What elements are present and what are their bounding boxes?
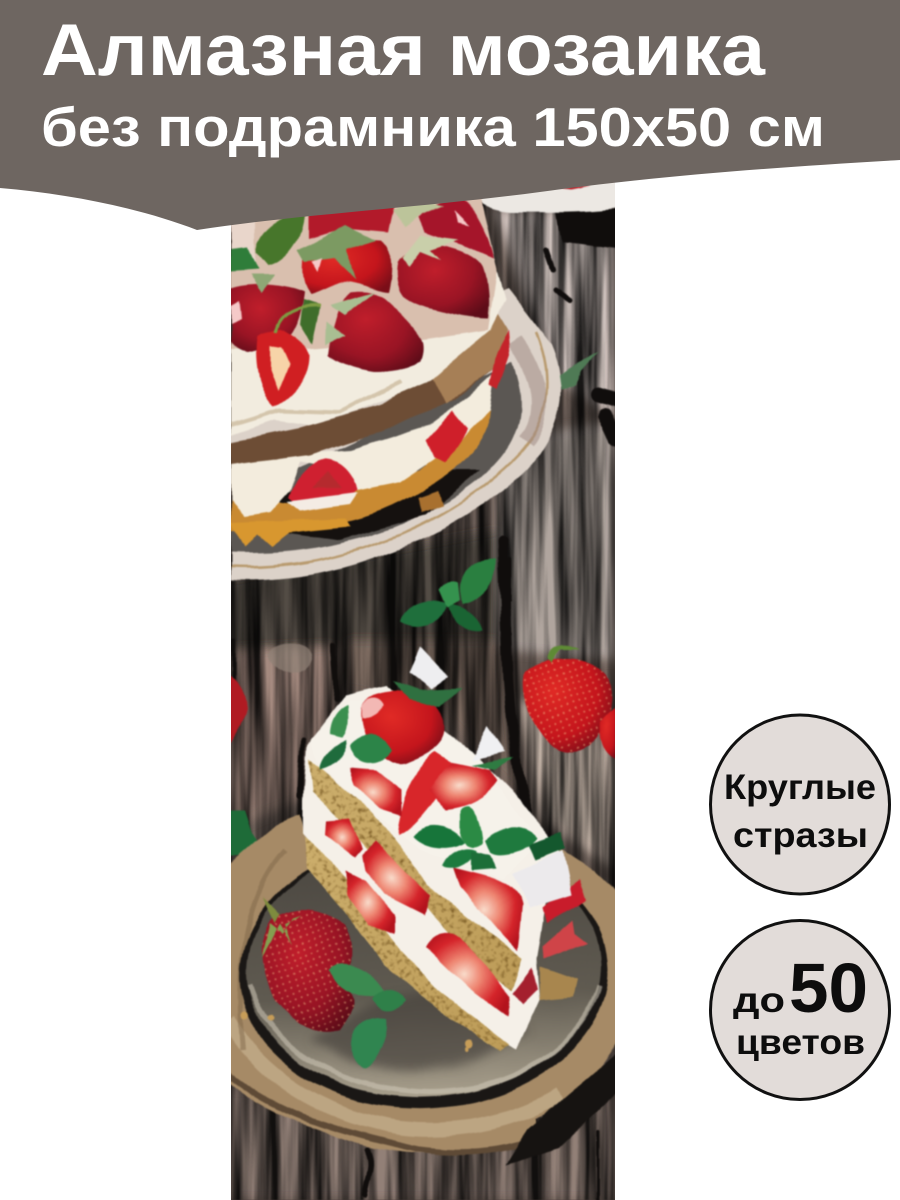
- strawberries on top: [308, 205, 394, 238]
- sponge band: [231, 369, 493, 465]
- big strawberry on slice: [361, 691, 446, 764]
- upper sponge layer: [309, 758, 523, 990]
- mint leaves on slice: [330, 705, 349, 738]
- photo: strawberry cakes on wooden table: [228, 178, 620, 1200]
- subtitle: без подрамника 150х50 см: [41, 96, 825, 158]
- loose strawberries on table: [228, 646, 618, 856]
- strawberry leaves: [231, 200, 460, 345]
- bottom sponge: [231, 410, 490, 531]
- badge: up to 50 colors: до: [733, 981, 785, 1020]
- plate rim: [231, 288, 562, 580]
- badge: round rhinestones: Круглые: [724, 768, 876, 807]
- slice base cream: [303, 685, 560, 1050]
- badge: round rhinestones: стразы: [733, 816, 868, 855]
- lower cream: [231, 372, 495, 516]
- lower sponge layer: [305, 838, 510, 1052]
- wood grain texture: [231, 178, 615, 1200]
- strawberry on plate: [262, 897, 405, 1068]
- wooden table: [231, 178, 615, 1200]
- stray mint on table: [560, 352, 600, 388]
- slice side strawberries: [325, 818, 362, 858]
- badge: round rhinestones: [710, 715, 890, 894]
- top cream: [231, 270, 506, 436]
- round plate: [238, 868, 608, 1110]
- highlights: [231, 210, 470, 325]
- white chocolate shards: [409, 646, 449, 689]
- wood cracks: [234, 212, 615, 1200]
- halved strawberry: [257, 330, 309, 407]
- strawberry slices on top: [398, 752, 455, 835]
- title: Алмазная мозаика: [41, 10, 767, 91]
- background white bowl: [480, 182, 615, 214]
- cake slice: [303, 646, 588, 1052]
- header banner: [0, 0, 900, 230]
- plate well: [231, 362, 521, 553]
- badge: up to 50 colors: 50: [789, 949, 868, 1027]
- wooden serving board: [228, 815, 620, 1165]
- badge: up to 50 colors: [710, 920, 890, 1100]
- mint beside strawberry: [328, 964, 385, 996]
- mint sprig on table: [400, 559, 496, 630]
- top cake: [231, 195, 600, 580]
- badge: up to 50 colors: цветов: [736, 1023, 865, 1062]
- whipped cream top layer: [310, 736, 314, 742]
